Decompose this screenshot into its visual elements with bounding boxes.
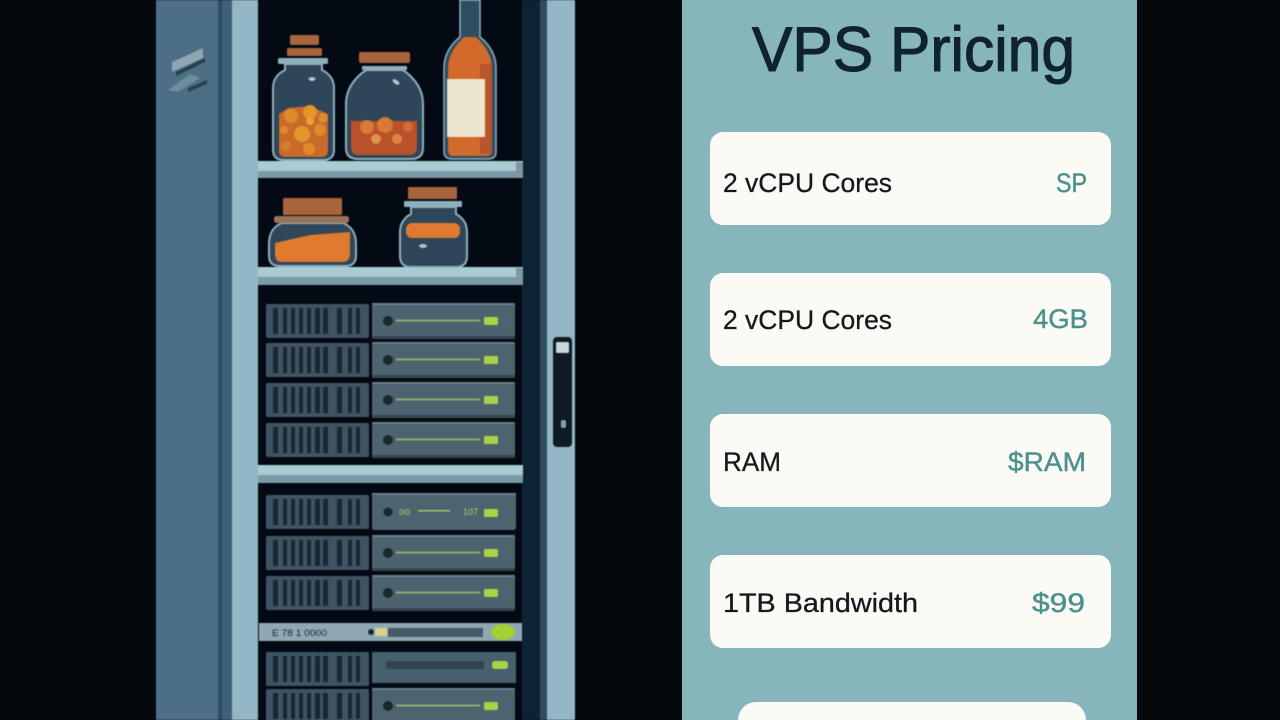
jar 2 with orange pieces (346, 52, 423, 159)
jar 1 with orange pieces (273, 35, 334, 160)
pricing panel (682, 0, 1137, 720)
server cabinet (156, 0, 575, 720)
pricing row 3: $RAM (1008, 447, 1086, 477)
labelled light strip (259, 623, 522, 641)
pricing row 1: SP (1056, 168, 1087, 198)
pricing row 4: 1TB Bandwidth (723, 588, 918, 618)
side panel logo (168, 48, 207, 92)
server unit 7 (266, 575, 515, 611)
server unit 2 (266, 342, 515, 378)
jar 4 with orange band (400, 187, 467, 267)
bottle label (447, 79, 485, 137)
title: VPS Pricing (752, 15, 1075, 85)
door handle (553, 337, 572, 447)
pricing row 3: RAM (723, 447, 781, 477)
cabinet side panel (156, 0, 218, 720)
pricing row 1: 2 vCPU Cores (723, 168, 892, 198)
shelf 1 (258, 161, 523, 178)
server unit 4 (266, 422, 515, 458)
partial button at bottom (738, 702, 1086, 720)
pricing row 3 (710, 414, 1111, 507)
bottle with label (444, 0, 496, 159)
pricing row 2: 4GB (1033, 304, 1088, 334)
cabinet interior (258, 0, 522, 720)
jar 3 wide with orange fill (269, 198, 356, 266)
server rack upper group (266, 303, 515, 458)
labelled light strip: E 78 1 0000 (272, 628, 327, 638)
server unit 5: 0/0 (399, 508, 411, 517)
server unit 5: 107 (463, 507, 478, 517)
server unit 3 (266, 382, 515, 418)
shelf 2 (258, 267, 523, 285)
server unit 6 (266, 535, 515, 571)
pricing row 4: $99 (1032, 588, 1085, 618)
server unit 5 (266, 493, 516, 530)
pricing row 4 (710, 555, 1111, 648)
left door post (232, 0, 258, 720)
server rack lower group (259, 493, 522, 720)
server unit 9 (266, 688, 515, 720)
server unit 8 (266, 652, 516, 686)
pricing row 2 (710, 273, 1111, 366)
right door post (547, 0, 575, 720)
right inner frame (522, 0, 540, 720)
shelf 3 (258, 465, 523, 483)
server unit 1 (266, 303, 515, 339)
pricing row 2: 2 vCPU Cores (723, 305, 892, 335)
pricing row 1 (710, 132, 1111, 225)
